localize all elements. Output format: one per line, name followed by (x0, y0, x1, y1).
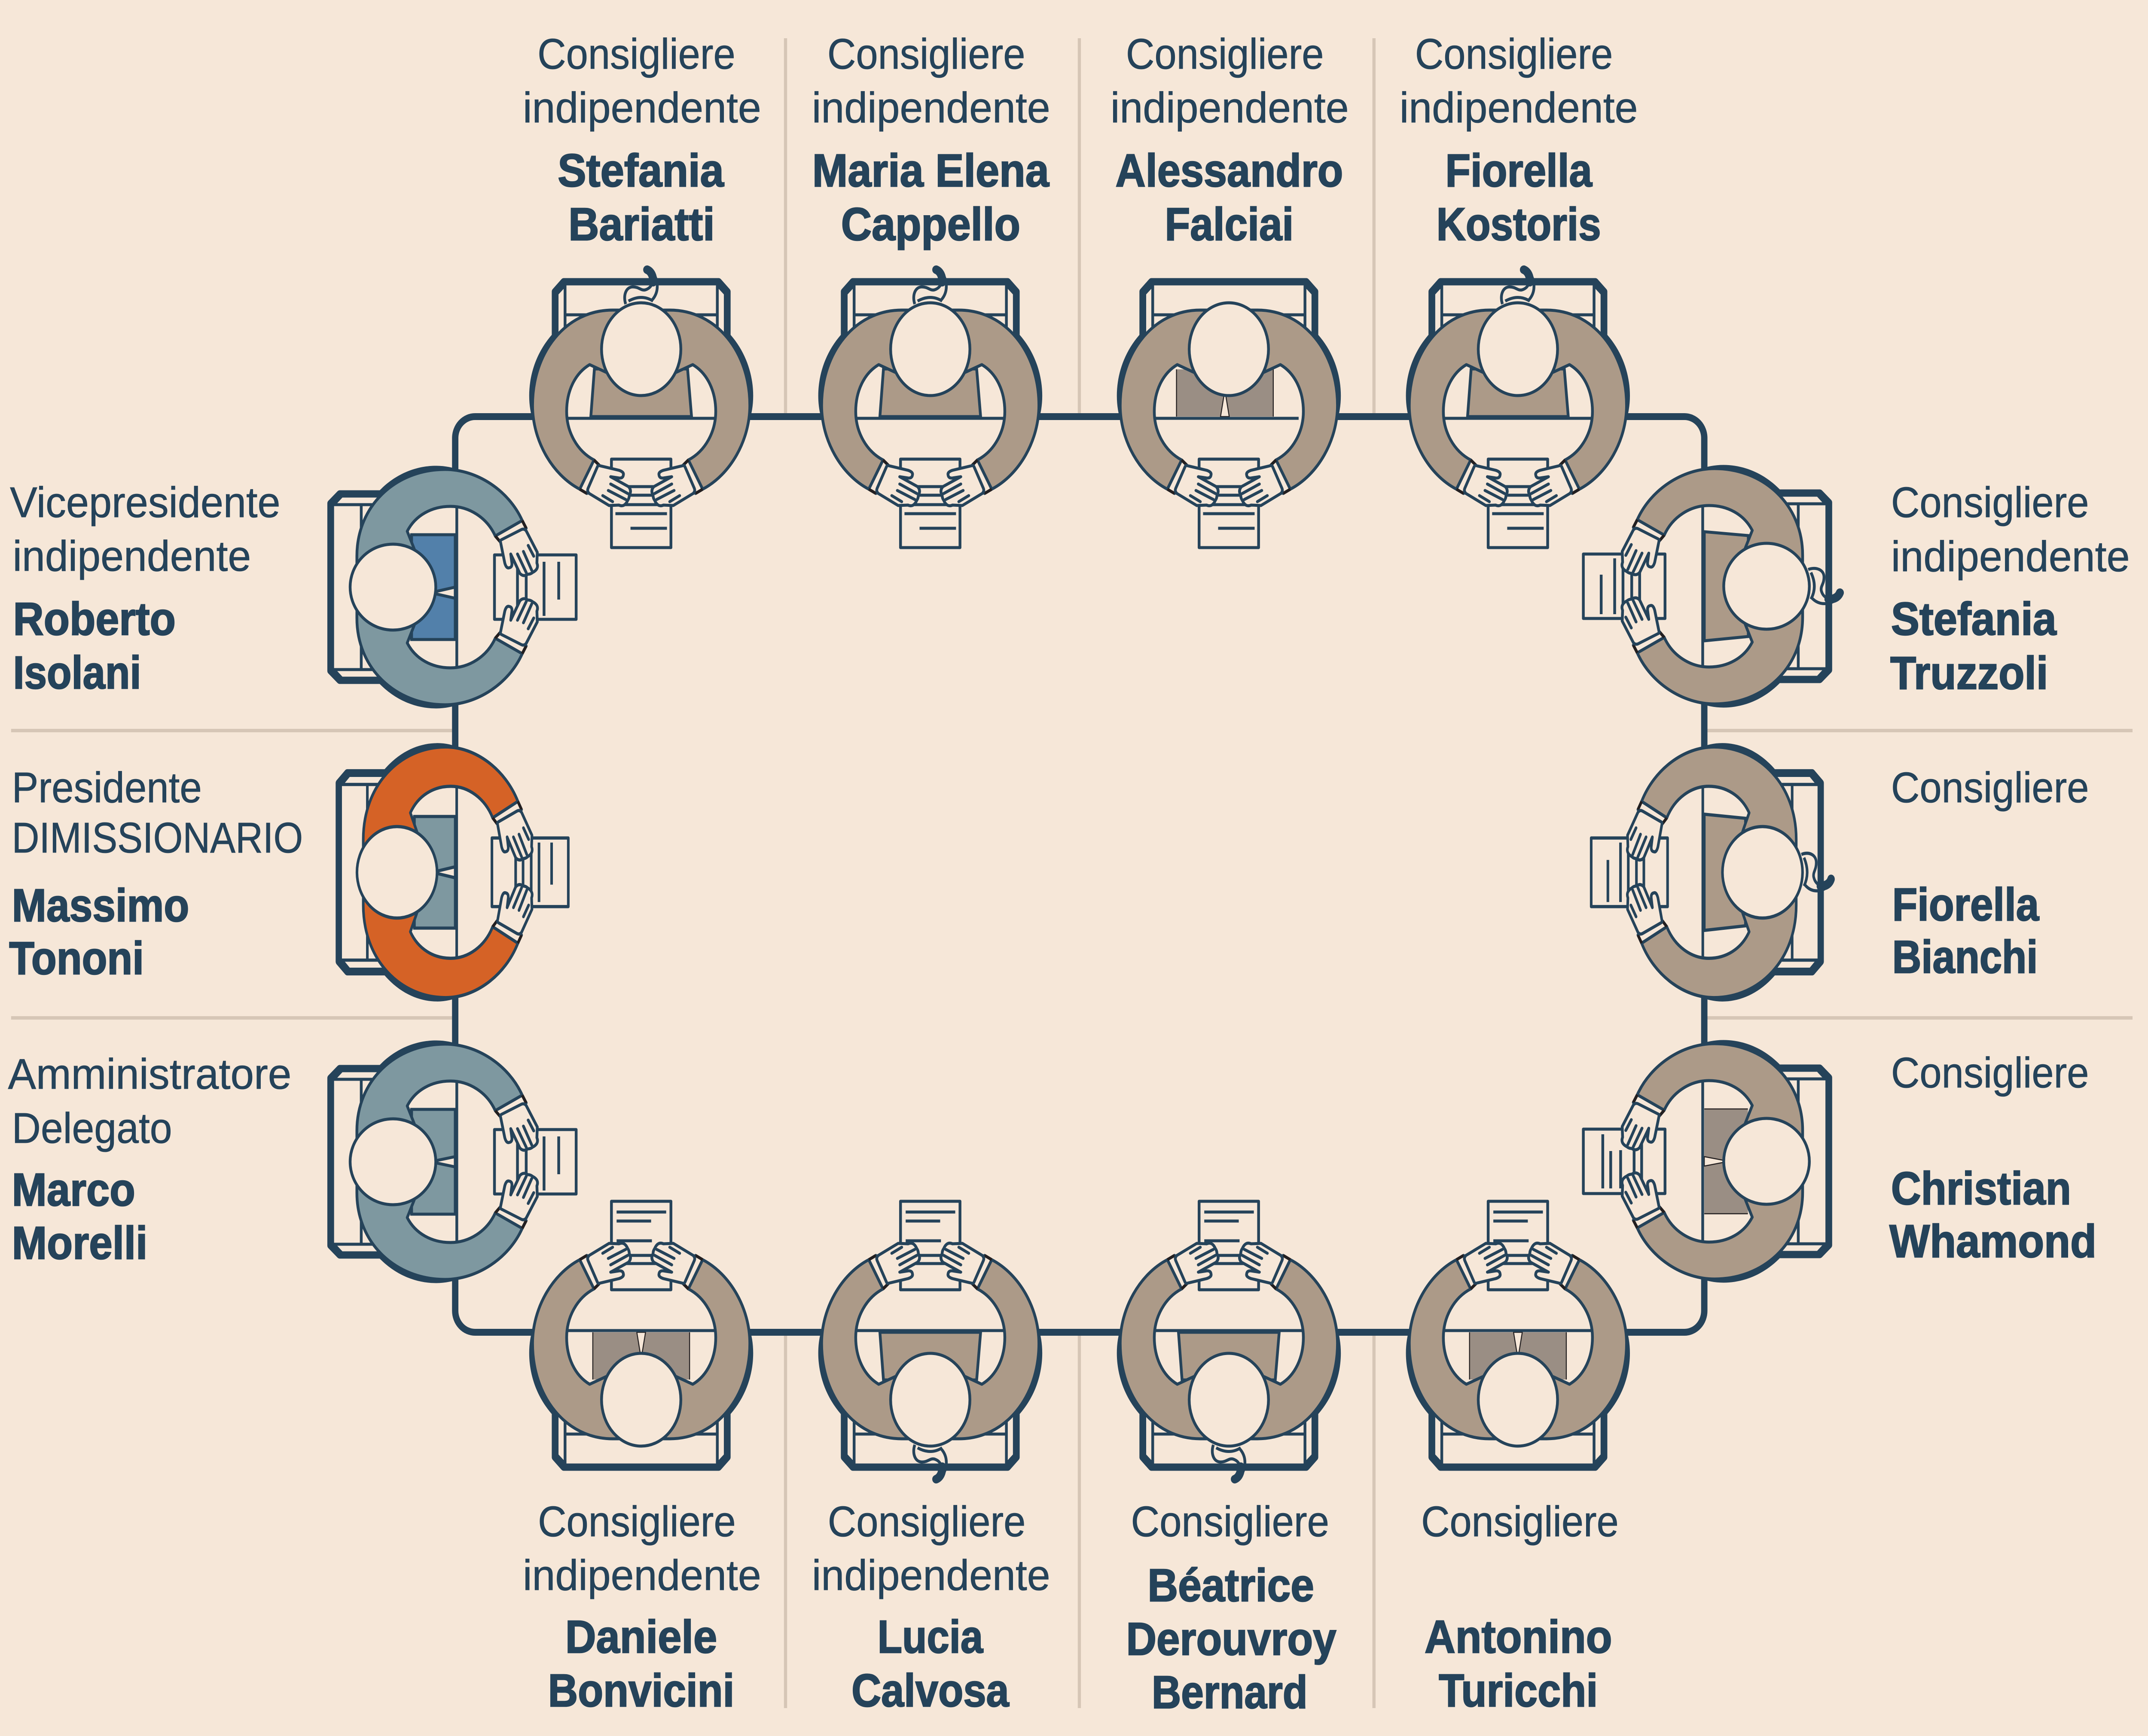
label: Béatrice Derouvroy Bernard: Béatrice (1147, 1559, 1314, 1611)
label: Alessandro Falciai (1111, 30, 1349, 250)
label: Massimo Tononi: DIMISSIONARIO (12, 814, 303, 862)
label: Massimo Tononi: Tononi (9, 932, 144, 984)
label: Daniele Bonvicini (523, 1498, 761, 1717)
person: Béatrice Derouvroy Bernard (1117, 1201, 1341, 1479)
person: Alessandro Falciai (1117, 282, 1341, 548)
label: Fiorella Bianchi (1891, 764, 2089, 983)
person: Massimo Tononi (339, 743, 568, 1002)
person: Stefania Truzzoli (1584, 465, 1840, 707)
label: Antonino Turicchi (1421, 1498, 1619, 1717)
label: Roberto Isolani: Isolani (13, 647, 141, 699)
label: Fiorella Kostoris: indipendente (1400, 84, 1638, 132)
label: Béatrice Derouvroy Bernard: Bernard (1152, 1666, 1308, 1718)
label: Antonino Turicchi: Consigliere (1421, 1498, 1619, 1546)
label: Lucia Calvosa (812, 1498, 1050, 1717)
label: Maria Elena Cappello (812, 30, 1050, 250)
label: Stefania Bariatti: indipendente (523, 84, 761, 132)
person: Christian Whamond (1584, 1040, 1829, 1282)
label: Béatrice Derouvroy Bernard: Derouvroy (1126, 1613, 1336, 1665)
label: Stefania Truzzoli: Consigliere (1891, 479, 2089, 527)
label: Christian Whamond: Consigliere (1891, 1049, 2089, 1097)
label: Marco Morelli: Marco (12, 1164, 135, 1216)
person: Roberto Isolani (331, 466, 576, 708)
label: Christian Whamond (1889, 1049, 2096, 1267)
label: Fiorella Kostoris: Consigliere (1415, 30, 1613, 78)
label: Christian Whamond: Christian (1891, 1163, 2071, 1215)
person: Marco Morelli (331, 1041, 576, 1283)
person: Fiorella Kostoris (1406, 270, 1630, 548)
label: Béatrice Derouvroy Bernard (1126, 1498, 1336, 1718)
label: Antonino Turicchi: Turicchi (1439, 1665, 1598, 1717)
label: Roberto Isolani: Roberto (13, 593, 176, 645)
person: Daniele Bonvicini (529, 1201, 753, 1467)
label: Fiorella Kostoris: Kostoris (1437, 198, 1601, 250)
label: Antonino Turicchi: Antonino (1425, 1611, 1612, 1663)
label: Roberto Isolani: indipendente (13, 533, 251, 580)
label: Maria Elena Cappello: Cappello (841, 198, 1020, 250)
label: Stefania Truzzoli (1890, 479, 2130, 699)
label: Lucia Calvosa: indipendente (812, 1552, 1050, 1599)
label: Daniele Bonvicini: indipendente (523, 1552, 761, 1599)
label: Massimo Tononi: Presidente (12, 764, 202, 812)
label: Alessandro Falciai: Consigliere (1126, 30, 1324, 78)
label: Marco Morelli: Delegato (12, 1105, 172, 1152)
label: Fiorella Bianchi: Bianchi (1892, 931, 2038, 983)
label: Fiorella Kostoris: Fiorella (1445, 145, 1593, 197)
label: Massimo Tononi: Massimo (12, 880, 189, 932)
label: Fiorella Bianchi: Fiorella (1892, 879, 2039, 931)
label: Stefania Truzzoli: indipendente (1891, 533, 2130, 581)
label: Massimo Tononi (9, 764, 303, 984)
person: Maria Elena Cappello (818, 270, 1042, 548)
label: Marco Morelli (8, 1051, 291, 1269)
label: Daniele Bonvicini: Consigliere (538, 1498, 736, 1546)
label: Stefania Bariatti: Consigliere (537, 30, 735, 78)
label: Marco Morelli: Morelli (12, 1217, 147, 1269)
label: Alessandro Falciai: indipendente (1111, 84, 1349, 132)
label: Marco Morelli: Amministratore (8, 1051, 291, 1098)
label: Maria Elena Cappello: Consigliere (827, 30, 1025, 78)
label: Stefania Bariatti: Stefania (558, 145, 724, 197)
label: Fiorella Bianchi: Consigliere (1891, 764, 2089, 812)
label: Daniele Bonvicini: Daniele (565, 1611, 717, 1663)
label: Alessandro Falciai: Alessandro (1115, 145, 1343, 197)
label: Maria Elena Cappello: indipendente (812, 84, 1050, 132)
label: Lucia Calvosa: Consigliere (828, 1498, 1025, 1546)
label: Stefania Truzzoli: Truzzoli (1890, 647, 2048, 699)
person: Lucia Calvosa (818, 1201, 1042, 1479)
label: Daniele Bonvicini: Bonvicini (548, 1665, 734, 1717)
label: Lucia Calvosa: Lucia (878, 1611, 983, 1663)
label: Stefania Bariatti: Bariatti (568, 198, 715, 250)
label: Béatrice Derouvroy Bernard: Consigliere (1131, 1498, 1329, 1546)
label: Maria Elena Cappello: Maria Elena (812, 145, 1050, 197)
person: Antonino Turicchi (1406, 1201, 1630, 1467)
label: Lucia Calvosa: Calvosa (851, 1665, 1010, 1717)
label: Christian Whamond: Whamond (1889, 1215, 2096, 1267)
person: Fiorella Bianchi (1591, 743, 1831, 1002)
label: Stefania Bariatti (523, 30, 761, 250)
person: Stefania Bariatti (529, 270, 753, 548)
label: Stefania Truzzoli: Stefania (1891, 593, 2057, 645)
label: Alessandro Falciai: Falciai (1165, 198, 1294, 250)
label: Roberto Isolani: Vicepresidente (10, 479, 281, 527)
label: Roberto Isolani (10, 479, 281, 699)
table (455, 417, 1704, 1332)
label: Fiorella Kostoris (1400, 30, 1638, 250)
